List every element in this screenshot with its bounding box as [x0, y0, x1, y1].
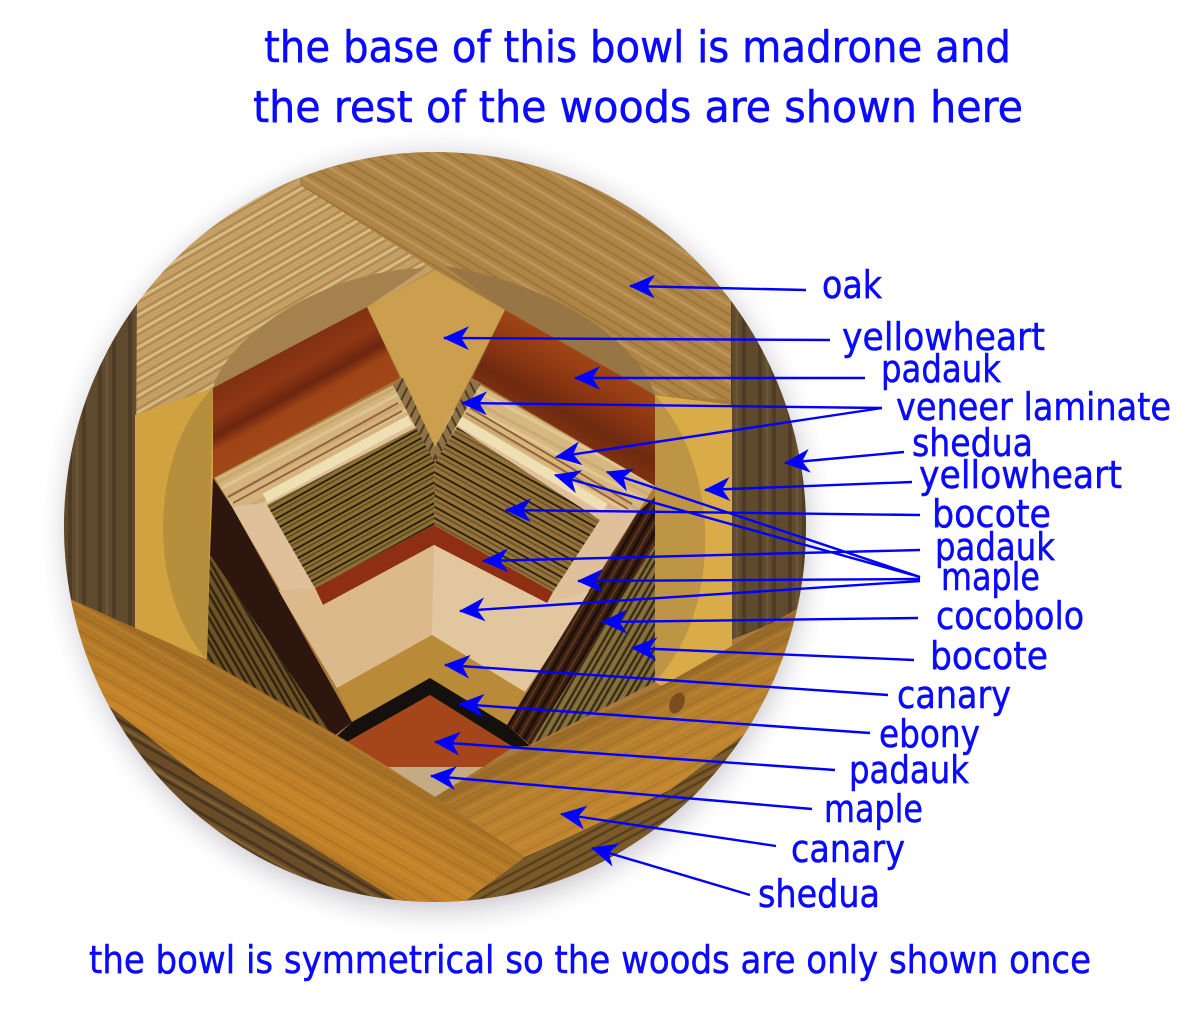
maple: upper left band — [215, 385, 413, 507]
arrow: shedua side — [785, 452, 904, 463]
bocote: center left — [267, 427, 435, 588]
label: yellowheart: yellowheart — [919, 453, 1122, 497]
label: yellowheart: yellowheart — [842, 315, 1045, 359]
label: veneer laminate: veneer laminate — [896, 385, 1171, 429]
arrow: oak — [630, 286, 806, 290]
padauk: upper right — [472, 310, 655, 486]
arrow: yellowheart center — [444, 338, 830, 340]
bocote: outer left — [207, 555, 333, 737]
bocote: center right — [434, 427, 600, 592]
arrow: padauk lower — [435, 742, 835, 770]
label: bocote: bocote — [930, 634, 1048, 678]
maple: upper right band — [460, 385, 655, 513]
shedua: bottom right — [466, 734, 744, 901]
label: cocobolo: cocobolo — [936, 594, 1084, 638]
label: padauk: padauk — [881, 347, 1001, 391]
maple: bottom tip — [388, 767, 483, 797]
canary: lower right — [435, 608, 798, 857]
veneer stripes — [228, 403, 632, 509]
arrow: bocote outer — [632, 648, 914, 660]
yellowheart: left side — [135, 388, 213, 660]
maple: lower left — [278, 545, 434, 688]
arrow: maple tip — [431, 776, 812, 809]
veneer laminate: left — [393, 378, 435, 463]
title: the rest of the woods are shown here — [253, 82, 1023, 133]
label: padauk: padauk — [849, 748, 969, 792]
veneer laminate: right — [435, 378, 480, 463]
canary: lower left — [50, 590, 525, 910]
arrow: canary center — [445, 665, 888, 695]
label: oak: oak — [822, 263, 882, 307]
arrow: ebony — [459, 704, 870, 733]
arrow: shedua lower — [592, 848, 750, 895]
shedua: right side — [731, 301, 806, 640]
label: maple: maple — [824, 787, 923, 831]
arrow: cocobolo — [602, 618, 918, 622]
label: shedua: shedua — [912, 421, 1033, 465]
label: ebony: ebony — [879, 712, 980, 756]
shedua: left side — [64, 304, 137, 628]
label: padauk: padauk — [935, 525, 1055, 569]
arrow: padauk thin — [483, 550, 920, 561]
arrow: maple strip — [555, 475, 920, 577]
label: canary: canary — [791, 827, 905, 871]
oak: top right rim — [293, 152, 784, 400]
title: the base of this bowl is madrone and — [264, 22, 1011, 73]
arrow: maple lower — [460, 581, 920, 611]
shedua: bottom left — [109, 706, 398, 900]
title — [253, 22, 1023, 133]
footer caption: the bowl is symmetrical so the woods are only shown once — [89, 938, 1091, 982]
maple: lower right — [432, 545, 593, 692]
label: maple: maple — [941, 555, 1040, 599]
arrow: maple band — [607, 472, 920, 577]
label: canary: canary — [897, 673, 1011, 717]
yellowheart: center wedge — [367, 270, 505, 447]
ebony chevron — [335, 678, 530, 747]
arrow: veneer laminate 2 — [556, 408, 882, 457]
oak: inner crescent left — [213, 268, 425, 388]
padauk: lower center — [347, 695, 513, 767]
photo: segmented wood bowl — [50, 140, 830, 920]
maple frame — [232, 400, 637, 692]
arrow: padauk upper — [575, 377, 865, 379]
bocote: outer right — [530, 545, 655, 745]
oak: left rim — [135, 178, 434, 414]
maple cream strip — [265, 420, 605, 508]
wood labels — [758, 263, 1171, 916]
padauk: upper left — [213, 307, 400, 478]
yellowheart: left crescent — [163, 388, 213, 660]
padauk: thin chevron — [315, 525, 553, 605]
oak: inner crescent right — [445, 266, 655, 395]
label: shedua: shedua — [758, 872, 880, 916]
yellowheart: right crescent — [655, 395, 705, 682]
arrow: canary lower — [561, 814, 776, 846]
canary: center chevron — [337, 635, 525, 725]
arrow: maple frame — [578, 579, 920, 581]
arrows — [431, 286, 920, 895]
arrow: yellowheart side — [705, 482, 912, 490]
cocobolo: left — [210, 478, 352, 737]
cocobolo: right — [507, 497, 655, 745]
arrow: bocote center — [506, 510, 920, 515]
arrow: veneer laminate 1 — [462, 403, 882, 408]
yellowheart: right side — [655, 395, 732, 690]
bowl shadow — [67, 156, 807, 910]
knot — [669, 692, 685, 714]
label: bocote: bocote — [932, 492, 1051, 536]
